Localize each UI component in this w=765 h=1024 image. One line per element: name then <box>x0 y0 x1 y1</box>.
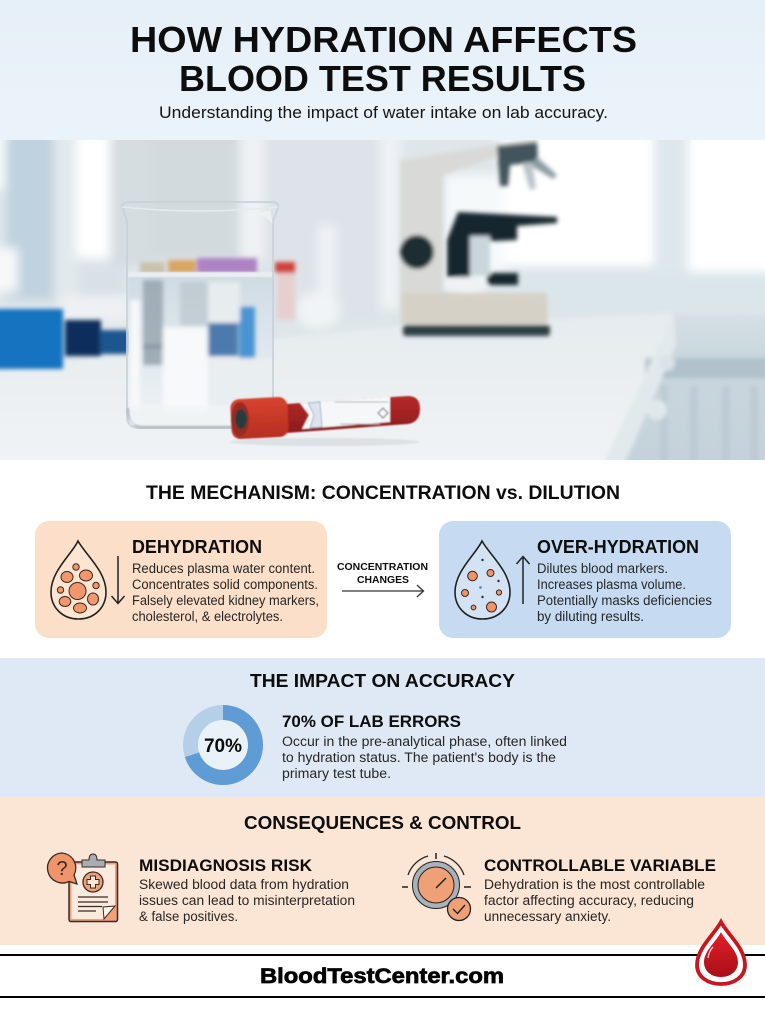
over-hydration heading: OVER-HYDRATION <box>537 537 699 557</box>
donut chart: 70% <box>190 712 256 778</box>
dehydration text: Reduces plasma water content. <box>132 561 315 576</box>
heading: consequences: CONSEQUENCES & CONTROL <box>244 812 521 833</box>
over-hydration text <box>537 561 712 624</box>
panel: over-hydration <box>439 521 731 638</box>
dehydration text: Concentrates solid components. <box>132 577 318 592</box>
microscope <box>400 138 557 336</box>
icon: clipboard with question bubble: ? <box>56 858 68 880</box>
hero photo: beaker of water and blood tube on a lab bench <box>0 130 765 470</box>
over-hydration text: by diluting results. <box>537 609 644 624</box>
icon: diluted blood drop <box>455 541 510 619</box>
misdiagnosis text: issues can lead to misinterpretation <box>139 893 355 908</box>
icon: control dial with check <box>402 853 471 920</box>
website name: BloodTestCenter.com <box>260 965 504 988</box>
panel: dehydration <box>35 521 327 638</box>
heading: impact: THE IMPACT ON ACCURACY <box>250 670 516 691</box>
title: HOW HYDRATION AFFECTS <box>130 19 637 60</box>
blue boxes <box>0 309 130 369</box>
stat text: Occur in the pre-analytical phase, often linked <box>282 734 567 749</box>
arrow: down <box>112 556 124 604</box>
header band <box>0 0 765 140</box>
misdiagnosis text: Skewed blood data from hydration <box>139 877 349 892</box>
stat text: to hydration status. The patient's body is the <box>282 750 556 765</box>
donut chart: 70%: 70% <box>204 736 242 757</box>
misdiagnosis heading: MISDIAGNOSIS RISK <box>139 856 313 875</box>
concentration changes connector: CHANGES <box>357 574 409 586</box>
controllable heading: CONTROLLABLE VARIABLE <box>484 856 716 875</box>
title <box>130 19 637 99</box>
subtitle: Understanding the impact of water intake on lab accuracy. <box>159 103 608 122</box>
dehydration text: Falsely elevated kidney markers, <box>132 593 319 608</box>
concentration changes connector <box>337 561 428 597</box>
blood tube <box>230 396 420 446</box>
controllable text: unnecessary anxiety. <box>484 909 611 924</box>
controllable text <box>484 877 705 924</box>
dehydration heading: DEHYDRATION <box>132 537 262 557</box>
over-hydration text: Increases plasma volume. <box>537 577 686 592</box>
panel: impact on accuracy <box>0 658 765 797</box>
misdiagnosis text: & false positives. <box>139 909 238 924</box>
icon: clipboard with question bubble <box>47 853 117 922</box>
controllable text: Dehydration is the most controllable <box>484 877 705 892</box>
arrow: up <box>516 556 530 604</box>
over-hydration text: Dilutes blood markers. <box>537 561 668 576</box>
stat heading: 70% OF LAB ERRORS <box>282 712 461 731</box>
footer <box>0 922 765 998</box>
title: BLOOD TEST RESULTS <box>179 58 586 99</box>
stat text: primary test tube. <box>282 766 391 781</box>
panel: consequences and control <box>0 797 765 945</box>
stat text <box>282 734 567 781</box>
icon: concentrated blood drop <box>51 541 106 619</box>
dehydration text: cholesterol, & electrolytes. <box>132 609 283 624</box>
icon: blood drop logo <box>697 922 745 984</box>
blurred items behind beaker <box>140 258 295 320</box>
table and cabinet <box>0 313 765 470</box>
misdiagnosis text <box>139 877 355 924</box>
over-hydration text: Potentially masks deficiencies <box>537 593 712 608</box>
photo background <box>0 140 765 364</box>
heading: mechanism: THE MECHANISM: CONCENTRATION vs. DILUTION <box>146 483 620 504</box>
controllable text: factor affecting accuracy, reducing <box>484 893 694 908</box>
dehydration text <box>132 561 319 624</box>
concentration changes connector: CONCENTRATION <box>337 561 428 573</box>
arrow: right <box>342 585 424 597</box>
beaker of water <box>122 202 295 428</box>
